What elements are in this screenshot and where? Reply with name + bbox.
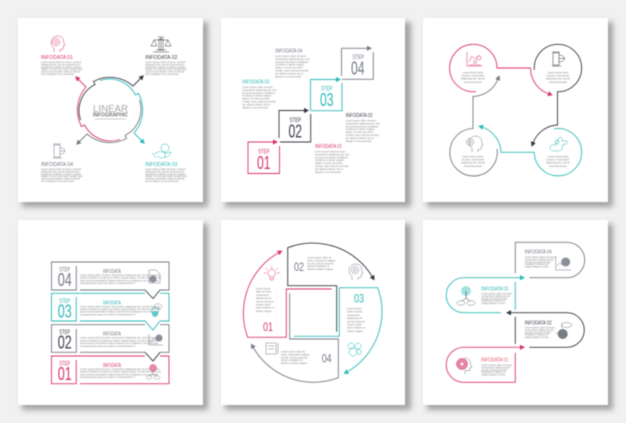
segment 03 teal xyxy=(294,288,382,372)
text block 02: labore et dolore magna xyxy=(307,268,334,271)
arrow ring: teal xyxy=(100,79,143,141)
row: step 03 xyxy=(52,293,169,330)
text block 03: veniam, quis nostrud exercitat xyxy=(242,100,276,104)
heading: infodata 04: INFODATA 04 xyxy=(525,249,552,255)
text: teal circle: eiusmod tempor xyxy=(549,165,567,168)
text: teal circle: adipiscing elit, sed do xyxy=(546,162,571,165)
text block 01: Lorem ipsum dolor sit amet, consect xyxy=(41,61,81,64)
heading: infodata 02: INFODATA 02 xyxy=(525,320,552,326)
text block 04: sed do eiusmod tempor xyxy=(525,261,551,264)
text block 04: consectetur adipiscing elit, sed xyxy=(275,58,310,61)
row: step 04: Lorem ipsum dolor sit amet, consectetur adipiscing elit, sed do eiusmod xyxy=(80,274,160,277)
text block 03: adipiscing elit, sed do eiusmod tem xyxy=(145,170,184,173)
heading: infodata 01: INFODATA 01 xyxy=(481,358,508,364)
circle link: teal xyxy=(482,127,582,176)
icon: teal cluster xyxy=(348,343,362,356)
text block 04: tempor incididunt ut xyxy=(281,359,303,362)
row: step 03: 03 xyxy=(58,301,72,321)
text block 01: dunt ut labore et xyxy=(256,307,274,310)
text block 04: labore et dolore magna xyxy=(281,362,307,365)
row: step 03: STEP xyxy=(59,298,70,305)
panel: four linked circles xyxy=(423,18,608,202)
text block 02: incididunt ut labore et xyxy=(525,334,549,337)
text: pink circle: sit amet, consectetur xyxy=(461,75,485,78)
text block 01: dolore magna xyxy=(256,310,272,313)
number 01: 01 xyxy=(263,320,273,334)
text: dark circle: Lorem ipsum dolor xyxy=(548,72,569,74)
step 01: STEP xyxy=(258,148,270,156)
text block 03: incididunt ut labore et dolore magna xyxy=(145,173,186,176)
text block 02: magna aliqua ut enim xyxy=(525,336,549,339)
text block 03: consectetur adipiscing elit xyxy=(481,295,510,298)
text block 03: magna aliqua ut enim xyxy=(481,302,505,305)
step 02 xyxy=(279,110,311,142)
icon: scales xyxy=(151,37,171,52)
icon: tower and mug xyxy=(53,144,65,158)
icon: light bulb xyxy=(264,266,280,280)
heading: infodata 03: INFODATA 03 xyxy=(145,162,177,168)
row: step 03: tempor incididunt ut labore et dolore magna aliqua. Ut enim ad minim ven xyxy=(80,308,162,311)
icon: head with target xyxy=(349,264,363,280)
text block 03: tempor incidi xyxy=(347,324,362,326)
text block 01: consectetur adipiscing elit, sed xyxy=(315,153,350,156)
text block 01: dolor sit amet, xyxy=(256,291,272,294)
text: gray circle: sit amet, consectetur xyxy=(461,159,485,162)
step 03 xyxy=(310,80,342,111)
text block 04: ing elit, sed do eiusmod xyxy=(281,356,308,359)
circle link: gray xyxy=(450,79,498,176)
row: step 01: Lorem ipsum dolor sit amet, consectetur adipiscing elit, sed do eiusmod xyxy=(80,368,160,371)
step 02: STEP xyxy=(290,117,301,124)
row: step 04: tempor incididunt ut labore et dolore magna aliqua. Ut enim ad minim ven xyxy=(80,277,162,280)
row: step 01: quis nostrud exercitation ullamco laboris nisi ut aliquip ex ea commodo xyxy=(80,373,159,376)
text block 04: aliquip ex ea commodo xyxy=(275,75,302,78)
heading: infodata 04: INFODATA 04 xyxy=(275,48,302,54)
number 03: 03 xyxy=(354,292,364,306)
text block 01: magna aliqua ut enim xyxy=(481,374,505,377)
text block 01: nostrud exercitation ullamco laboris xyxy=(41,71,81,74)
row: step 01: STEP xyxy=(59,360,70,368)
text block 01: ion ullamco laboris nisi ut xyxy=(315,168,343,171)
text block 01: adipiscing elit, sed do eiusmod tem xyxy=(41,63,80,66)
text block 03: Lorem ipsum dolor sit amet, consect xyxy=(145,168,186,171)
text: teal circle: sit amet, consectetur xyxy=(546,159,570,162)
text block 04: consectetur adipiscing elit xyxy=(525,258,554,261)
text block 03: nostrud exercitation ullamco laboris xyxy=(145,178,185,181)
text block 01: tempor incidi xyxy=(256,304,271,306)
heading: infodata 01: INFODATA 01 xyxy=(41,55,73,61)
icon: note xyxy=(266,343,278,354)
icon: teal cloud xyxy=(550,137,567,151)
row: step 02: 02 xyxy=(58,333,72,353)
segment 04 gray xyxy=(253,293,338,382)
text block 01: aliquip ex ea commodo xyxy=(315,171,341,174)
text block 04: magna aliqua ut enim xyxy=(525,266,549,269)
text block 02: tempor incididunt ut xyxy=(307,265,329,268)
step 01: 01 xyxy=(257,153,270,173)
text block 04: incididunt ut labore et dolore magna xyxy=(41,173,81,176)
segment 01 pink xyxy=(243,252,332,337)
text: teal circle: Lorem ipsum dolor xyxy=(548,156,569,158)
text block 03: adipiscing elit, xyxy=(347,317,363,320)
heading: infodata 02: INFODATA 02 xyxy=(145,55,177,61)
text block 02: ut labore et dolore magna xyxy=(346,128,375,131)
path 01 pink xyxy=(446,347,521,382)
text: dark circle: eiusmod tempor xyxy=(549,81,567,84)
row: step 03: consequat duis aute irure dolor in reprehenderit in xyxy=(80,313,136,316)
text block 03: do eiusmod tempor incididunt xyxy=(242,92,275,95)
path 03 teal xyxy=(446,278,521,313)
panel: circle of interlocking squares xyxy=(221,220,405,405)
text block 01: sed do eiusmod tempor xyxy=(481,369,508,372)
text block 03: sed do eiusmod tempor xyxy=(481,297,508,300)
text block 03: aliquip ex ea commodo xyxy=(242,106,269,109)
panel: serpentine path xyxy=(423,220,608,405)
arrow ring: dark xyxy=(79,77,141,120)
text block 02: veniam, quis nostrud exercitat xyxy=(346,134,379,137)
text block 02: aliqua. Ut enim ad minim veniam quis xyxy=(145,68,188,71)
text: pink circle: adipiscing elit, sed do xyxy=(461,78,486,81)
text block 03: sed do eiusmod xyxy=(347,320,365,323)
text block 03: ion ullamco laboris nisi ut xyxy=(242,103,271,106)
connector 03 teal xyxy=(514,282,516,310)
row: step 02: INFODATA xyxy=(103,332,121,338)
row: step 02: quis nostrud exercitation ullamco laboris nisi ut aliquip ex ea commodo xyxy=(80,342,159,345)
text block 01: ut labore et dolore magna xyxy=(315,159,344,162)
row: step 03: quis nostrud exercitation ullamco laboris nisi ut aliquip ex ea commodo xyxy=(80,311,159,314)
text: pink circle: Lorem ipsum dolor xyxy=(463,72,484,74)
panel: staircase steps xyxy=(221,18,405,202)
text block 02: incididunt ut labore et dolore magna xyxy=(145,66,186,69)
row: step 04: consequat duis aute irure dolor in reprehenderit in xyxy=(80,282,136,285)
heading: infodata 04: INFODATA 04 xyxy=(41,162,73,168)
icon: chart with globe xyxy=(556,256,571,270)
step 03: 03 xyxy=(320,90,334,110)
text block 01: nisi ut aliquip ex ea commodo xyxy=(41,73,75,76)
row: step 04: STEP xyxy=(59,266,70,274)
text block 02: ing elit, sed do eiusmod xyxy=(307,262,334,265)
row: step 03: Lorem ipsum dolor sit amet, consectetur adipiscing elit, sed do eiusmod xyxy=(80,305,160,308)
row: step 03: INFODATA xyxy=(103,300,121,306)
step 02: 02 xyxy=(288,122,302,142)
icon: teal network xyxy=(457,286,475,305)
text: gray circle: eiusmod tempor xyxy=(464,165,482,168)
step 04: 04 xyxy=(351,58,364,78)
text: pink circle: eiusmod tempor xyxy=(464,81,482,84)
row: step 01: 01 xyxy=(58,364,72,384)
text block 01: veniam, quis nostrud exercitat xyxy=(315,165,349,168)
row: step 02: Lorem ipsum dolor sit amet, consectetur adipiscing elit, sed do eiusmod xyxy=(80,337,160,340)
text block 03: Lorem ipsum xyxy=(347,308,361,310)
text block 03: nisi ut aliquip ex ea commodo xyxy=(145,180,179,183)
icon: head with gear xyxy=(51,36,65,52)
text block 04: Lorem ipsum dolor sit amet, xyxy=(275,55,306,58)
row: step 04: INFODATA xyxy=(103,269,121,275)
text block 01: aliqua. Ut enim ad minim xyxy=(315,162,343,165)
icon: head with pink gear xyxy=(456,358,472,374)
text block 01: Lorem ipsum dolor sit amet, xyxy=(481,364,512,367)
text block 01: Lorem ipsum xyxy=(256,288,270,290)
path 04 gray xyxy=(515,242,585,278)
row: step 01: INFODATA xyxy=(103,363,121,369)
text block 02: consectetur adipiscing elit xyxy=(525,329,554,332)
icon: globe and clouds xyxy=(556,322,572,339)
text block 03: consectetur adipiscing elit, sed xyxy=(242,89,277,92)
row: step 02: tempor incididunt ut labore et dolore magna aliqua. Ut enim ad minim ven xyxy=(80,339,162,342)
text block 04: Lorem ipsum dolor sit xyxy=(281,350,305,354)
panel: stacked step rows xyxy=(18,220,203,405)
step 01 xyxy=(248,142,280,174)
text block 04: veniam, quis nostrud exercitat xyxy=(275,70,309,72)
number 02: 02 xyxy=(294,260,304,274)
text block 04: Lorem ipsum dolor sit amet, consect xyxy=(41,168,81,171)
center title: INFOGRAPHIC xyxy=(93,112,128,118)
text block 04: aliqua. Ut enim ad minim veniam quis xyxy=(41,175,83,178)
text block 01: do eiusmod tempor incididunt xyxy=(315,156,348,159)
center title: LINEAR xyxy=(93,104,128,115)
heading: infodata 02: INFODATA 02 xyxy=(346,113,373,119)
text block 04: Lorem ipsum dolor sit amet, xyxy=(525,256,556,259)
text block 02: sed do eiusmod tempor xyxy=(525,331,551,334)
text block 04: nostrud exercitation ullamco laboris xyxy=(41,178,81,181)
text block 04: adipiscing elit, sed do eiusmod tem xyxy=(41,170,80,173)
text block 01: incididunt ut labore et xyxy=(481,371,505,374)
text block 02: adipiscing elit, sed do eiusmod tem xyxy=(145,63,184,66)
path 02 dark xyxy=(510,313,584,347)
text: dark circle: adipiscing elit, sed do xyxy=(546,78,571,81)
text block 02: Lorem ipsum dolor sit amet, xyxy=(346,120,377,122)
text block 02: aliquip ex ea commodo xyxy=(346,140,372,143)
icon: tower mug xyxy=(552,52,565,66)
text block 04: incididunt ut labore et xyxy=(525,263,549,266)
text block 04: do eiusmod tempor incididunt xyxy=(275,61,308,64)
row: step 04 xyxy=(52,262,169,298)
text block 04: amet, consectetur adipisc xyxy=(281,353,310,356)
text block 02: consectetur adipiscing elit, sed xyxy=(346,122,380,125)
text block 02: ion ullamco laboris nisi ut xyxy=(346,137,374,140)
text block 01: adipiscing elit, xyxy=(256,297,272,300)
text block 03: dolor sit amet, xyxy=(347,311,363,314)
text block 03: ut labore et dolore magna xyxy=(242,95,271,98)
row: step 02: STEP xyxy=(59,329,70,336)
text block 04: ut labore et dolore magna xyxy=(275,64,304,67)
text block 02: Lorem ipsum dolor sit amet, xyxy=(525,326,556,330)
text block 03: Lorem ipsum dolor sit amet, xyxy=(481,292,512,296)
arrow ring: pink xyxy=(77,79,120,141)
circle link: pink xyxy=(450,44,549,94)
row: step 01 xyxy=(52,356,169,384)
text block 02: aliqua. Ut enim ad minim xyxy=(346,131,373,134)
circle link: dark xyxy=(533,44,582,143)
icon: hand with coin xyxy=(152,144,171,158)
row: step 02 xyxy=(52,325,169,361)
icon: head with gear xyxy=(466,136,483,152)
row: step 04: quis nostrud exercitation ullamco laboris nisi ut aliquip ex ea commodo xyxy=(80,279,159,282)
text block 03: dunt ut labore et xyxy=(347,327,365,330)
text block 04: ion ullamco laboris nisi ut xyxy=(275,72,304,75)
heading: infodata 03: INFODATA 03 xyxy=(481,286,508,292)
text block 03: incididunt ut labore et xyxy=(481,300,505,303)
row: step 01: tempor incididunt ut labore et dolore magna aliqua. Ut enim ad minim ven xyxy=(80,371,162,374)
text block 02: nostrud exercitation ullamco laboris xyxy=(145,71,185,74)
text block 02: amet, consectetur adipisc xyxy=(307,259,336,262)
heading: infodata 01: INFODATA 01 xyxy=(315,144,342,150)
arrow ring: gray xyxy=(79,100,141,143)
text block 02: Lorem ipsum dolor sit amet, consect xyxy=(145,61,186,64)
text block 04: nisi ut aliquip ex ea commodo xyxy=(41,180,75,183)
text block 03: aliqua. Ut enim ad minim xyxy=(242,98,270,101)
text block 03: aliqua. Ut enim ad minim veniam quis xyxy=(145,175,188,178)
number 04: 04 xyxy=(322,352,332,366)
text: dark circle: sit amet, consectetur xyxy=(546,75,570,78)
panel: circular four arrows infographic xyxy=(18,18,203,202)
text block 01: consectetur xyxy=(256,294,269,297)
text block 01: sed do eiusmod xyxy=(256,300,274,303)
heading: infodata 03: INFODATA 03 xyxy=(242,79,269,85)
text: gray circle: Lorem ipsum dolor xyxy=(463,156,484,158)
row: step 01: consequat duis aute irure dolor in reprehenderit in xyxy=(80,376,136,379)
row: step 02: consequat duis aute irure dolor in reprehenderit in xyxy=(80,345,136,348)
step 03: STEP xyxy=(321,86,332,92)
icon: growth chart xyxy=(467,52,482,66)
text block 01: Lorem ipsum dolor sit amet, xyxy=(315,150,346,154)
text block 02: nisi ut aliquip ex ea commodo xyxy=(145,73,179,76)
text block 03: dolore magna xyxy=(347,330,363,333)
text block 03: consectetur xyxy=(347,314,360,317)
step 04 xyxy=(342,48,373,79)
text block 02: do eiusmod tempor incididunt xyxy=(346,125,379,128)
text block 01: incididunt ut labore et dolore magna xyxy=(41,66,81,69)
text block 02: Lorem ipsum dolor sit xyxy=(307,256,332,260)
text block 01: consectetur adipiscing elit xyxy=(481,366,510,369)
connector 02 dark xyxy=(514,317,516,344)
text: gray circle: adipiscing elit, sed do xyxy=(461,162,486,165)
step 04: STEP xyxy=(352,54,364,61)
text block 03: Lorem ipsum dolor sit amet, xyxy=(242,86,273,89)
text block 01: aliqua. Ut enim ad minim veniam quis xyxy=(41,68,83,71)
text block 04: aliqua. Ut enim ad minim xyxy=(275,67,303,70)
row: step 04: 04 xyxy=(58,270,72,290)
segment 02 dark xyxy=(288,243,372,332)
